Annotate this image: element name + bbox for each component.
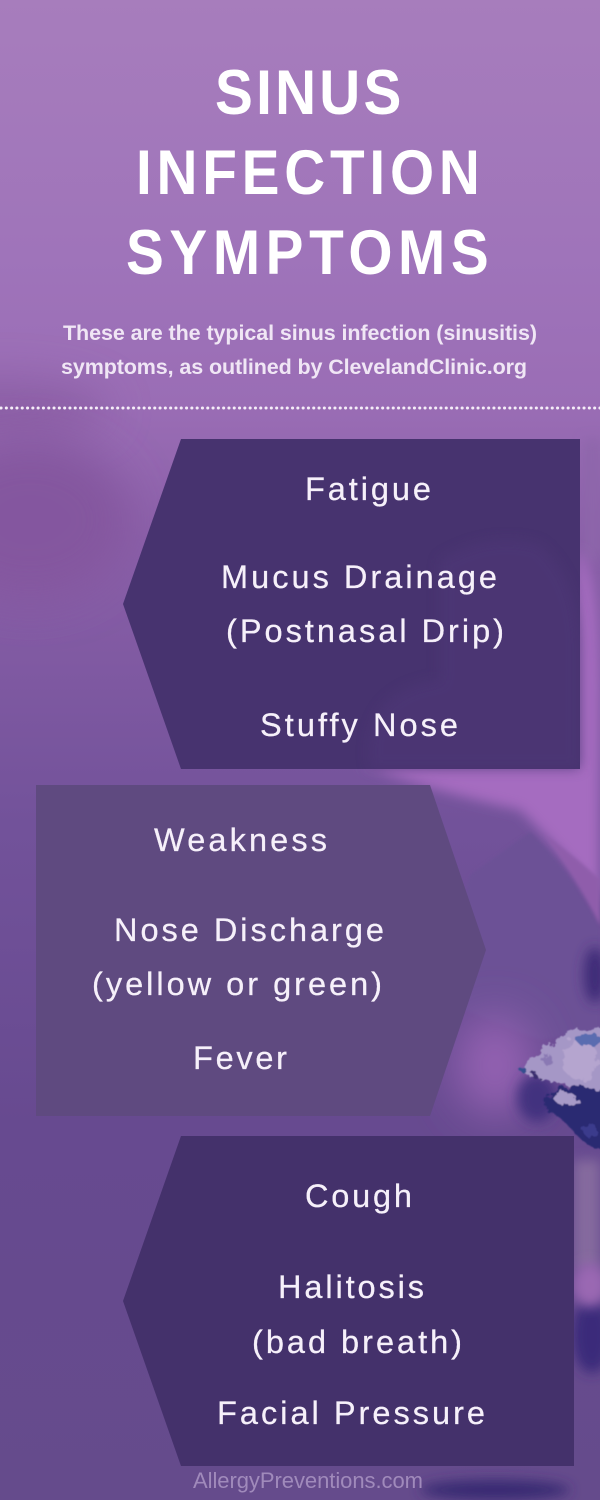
panel: weakness group: Weakness [154, 822, 327, 858]
panel: fatigue group: (Postnasal Drip) [226, 613, 504, 649]
panel: fatigue group: Fatigue [305, 471, 431, 507]
panel: fatigue group: Mucus Drainage [221, 559, 497, 595]
panel: weakness group: (yellow or green) [92, 966, 382, 1002]
panel: fatigue group [123, 439, 580, 769]
intro text [61, 321, 537, 379]
panel: cough group: (bad breath) [252, 1324, 462, 1360]
title: SYMPTOMS [126, 217, 489, 288]
title: SINUS [215, 57, 401, 128]
intro text: These are the typical sinus infection (sinusitis) [63, 321, 537, 345]
dotted divider [1, 406, 600, 410]
title: INFECTION [136, 137, 480, 208]
panel: weakness group: Fever [193, 1040, 287, 1076]
panel: weakness group: Nose Discharge [114, 912, 384, 948]
intro text: symptoms, as outlined by ClevelandClinic.org [61, 355, 527, 379]
panel: fatigue group: Stuffy Nose [260, 707, 458, 743]
panel: weakness group [36, 785, 486, 1116]
panel: cough group: Halitosis [278, 1269, 424, 1305]
panel: cough group [123, 1136, 574, 1466]
title [126, 57, 489, 288]
footer credit: AllergyPreventions.com [193, 1468, 423, 1493]
panel: cough group: Cough [305, 1178, 412, 1214]
panel: cough group: Facial Pressure [217, 1395, 485, 1431]
